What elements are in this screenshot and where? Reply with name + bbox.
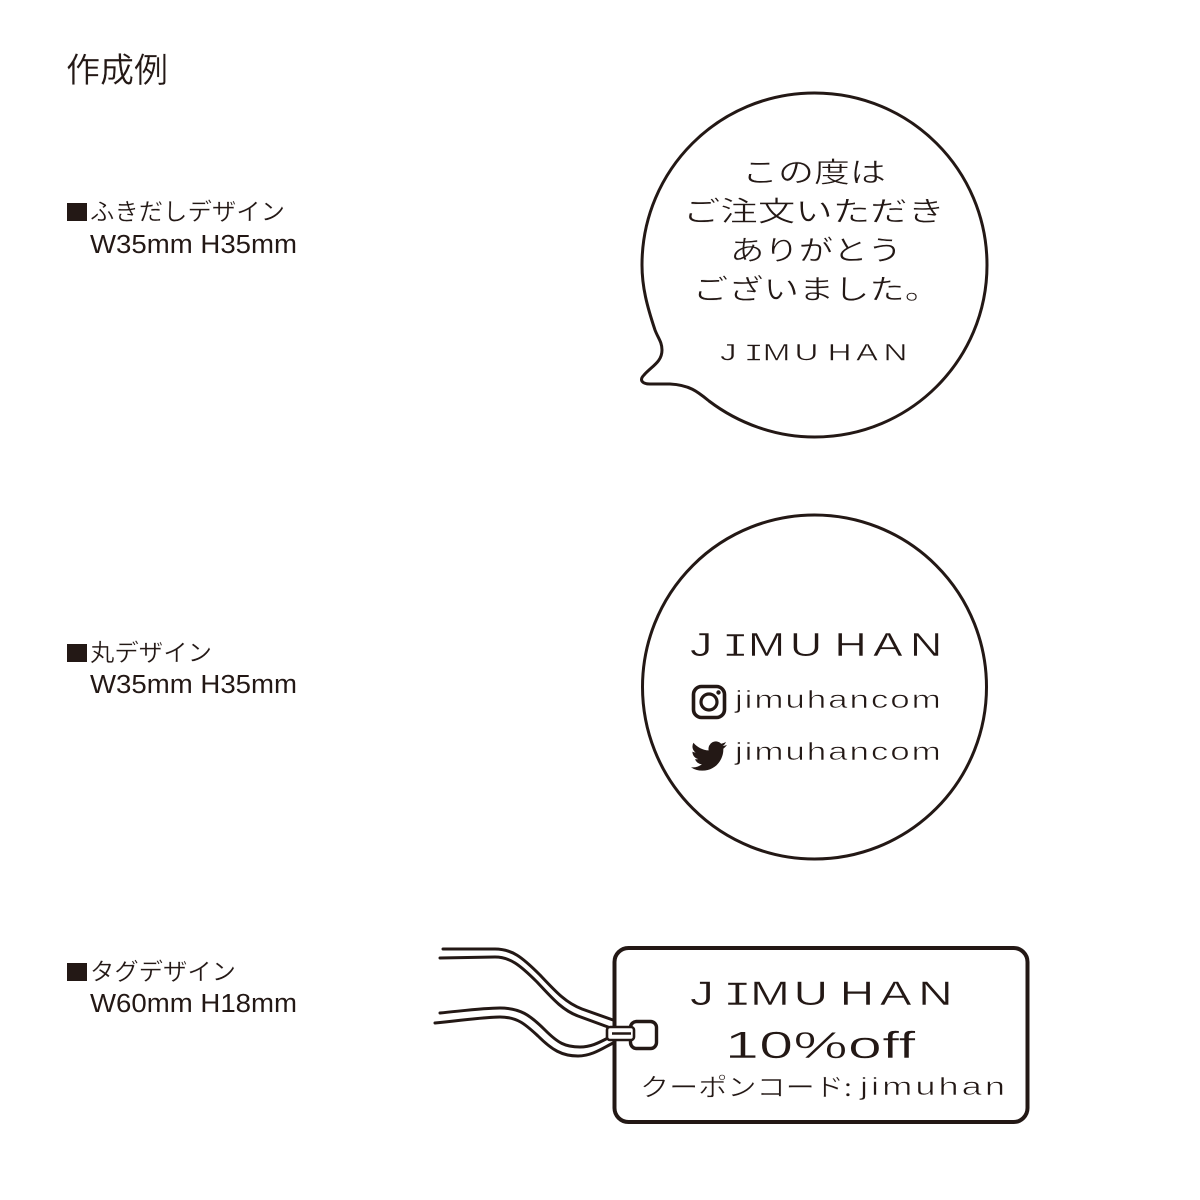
thank-you message: ございました。 <box>693 268 940 308</box>
string loop eyelet <box>607 1022 656 1048</box>
brand logo: J IMUHAN <box>690 975 953 1016</box>
label: tag design: W60mm H18mm <box>90 990 297 1018</box>
circle outline <box>642 515 986 859</box>
instagram handle: jimuhancom <box>734 686 941 714</box>
thank-you message <box>683 151 945 308</box>
label: round design: W35mm H35mm <box>90 671 297 699</box>
label: round design <box>67 633 297 699</box>
icon: instagram <box>694 686 724 718</box>
coupon code katakana: クーポンコード: <box>640 1068 852 1104</box>
discount text: 10%off <box>725 1024 916 1066</box>
brand logo: J IMUHAN <box>690 627 942 666</box>
tag outline <box>614 948 1028 1122</box>
label: speech bubble design <box>67 192 297 259</box>
speech bubble outline <box>642 93 987 437</box>
label: speech bubble design: ふきだしデザイン <box>90 192 285 227</box>
thank-you message: ありがとう <box>730 229 902 269</box>
panel: speech bubble sticker <box>642 93 987 437</box>
thank-you message: この度は <box>742 151 886 191</box>
title: 作成例 <box>66 43 168 92</box>
string <box>435 949 613 1056</box>
label: tag design <box>67 952 297 1018</box>
coupon code value: jimuhan <box>859 1073 1005 1101</box>
label: round design: 丸デザイン <box>90 633 212 668</box>
icon: twitter bird <box>691 741 727 771</box>
panel: hang tag <box>435 948 1028 1122</box>
label: tag design: タグデザイン <box>90 952 236 987</box>
panel: round sticker <box>642 515 986 859</box>
label: speech bubble design: W35mm H35mm <box>90 231 297 259</box>
brand logo: J IMUHAN <box>720 340 907 368</box>
twitter handle: jimuhancom <box>734 738 941 766</box>
thank-you message: ご注文いただき <box>683 190 945 230</box>
